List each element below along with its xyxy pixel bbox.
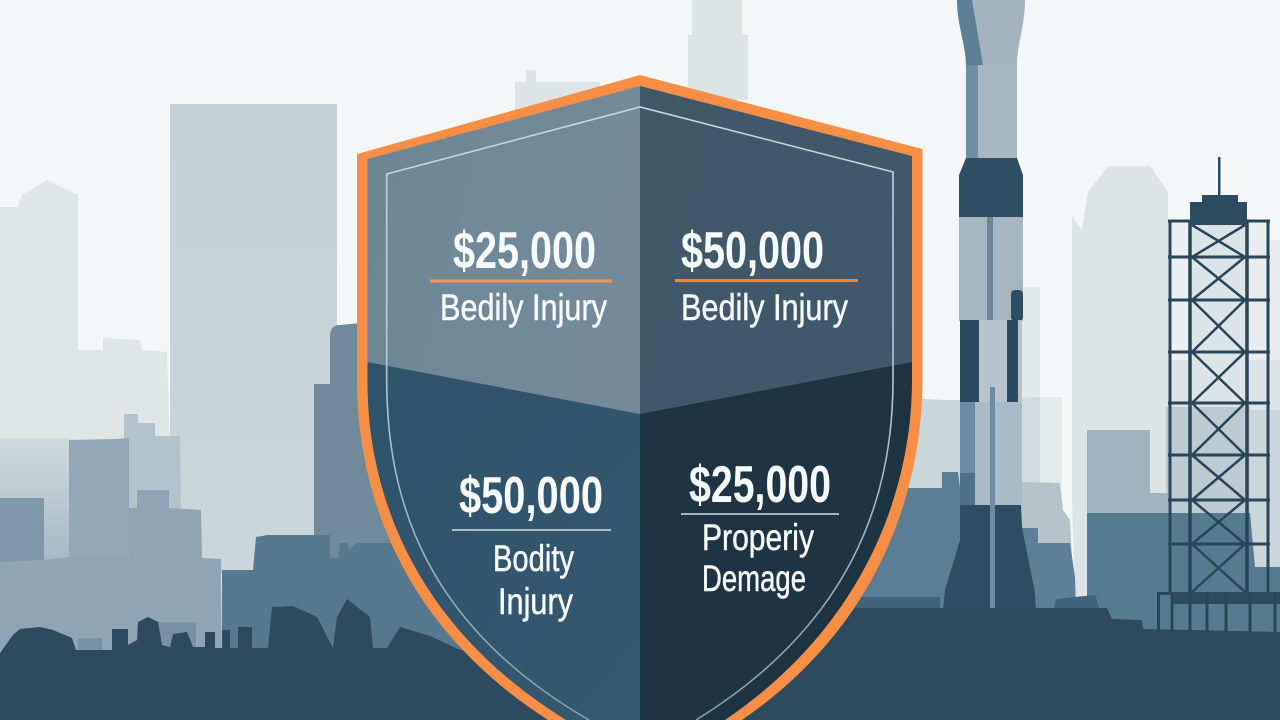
small background structures left [78, 622, 196, 652]
coverage block: bottom right: Properiy [702, 517, 814, 558]
distant skyline left [0, 180, 170, 445]
ground right [640, 608, 1280, 720]
shield inner outline [387, 107, 893, 720]
coverage block: top right [675, 222, 858, 328]
coverage block: bottom left [452, 467, 611, 622]
rocket tower [943, 0, 1036, 610]
coverage block: top right: Bedily Injury [681, 287, 848, 328]
distant towers top center [515, 0, 748, 110]
rear buildings left [0, 414, 222, 660]
mid building left [222, 535, 500, 660]
lattice tower [1157, 157, 1280, 632]
ground and trees left [0, 599, 640, 720]
coverage block: bottom right: Demage [702, 558, 806, 599]
shield orange border [357, 75, 922, 720]
tall pale building [170, 104, 337, 574]
coverage block: bottom right [681, 456, 839, 599]
coverage block: top left: Bedily Injury [440, 287, 607, 328]
rear buildings right of rocket [820, 395, 1076, 610]
coverage block: top right: $50,000 [681, 222, 824, 280]
coverage block: top left: $25,000 [453, 222, 596, 280]
distant skyline right [1022, 166, 1280, 600]
coverage block: bottom left: Injury [498, 581, 573, 622]
coverage block: top left [430, 222, 612, 328]
shield quadrants [368, 86, 912, 720]
coverage block: bottom left: Bodity [493, 538, 574, 579]
coverage block: bottom right: $25,000 [689, 456, 831, 514]
rear building right [1053, 430, 1280, 635]
coverage block: bottom left: $50,000 [459, 467, 603, 525]
stepped building by shield [314, 323, 420, 560]
shield [340, 60, 940, 720]
